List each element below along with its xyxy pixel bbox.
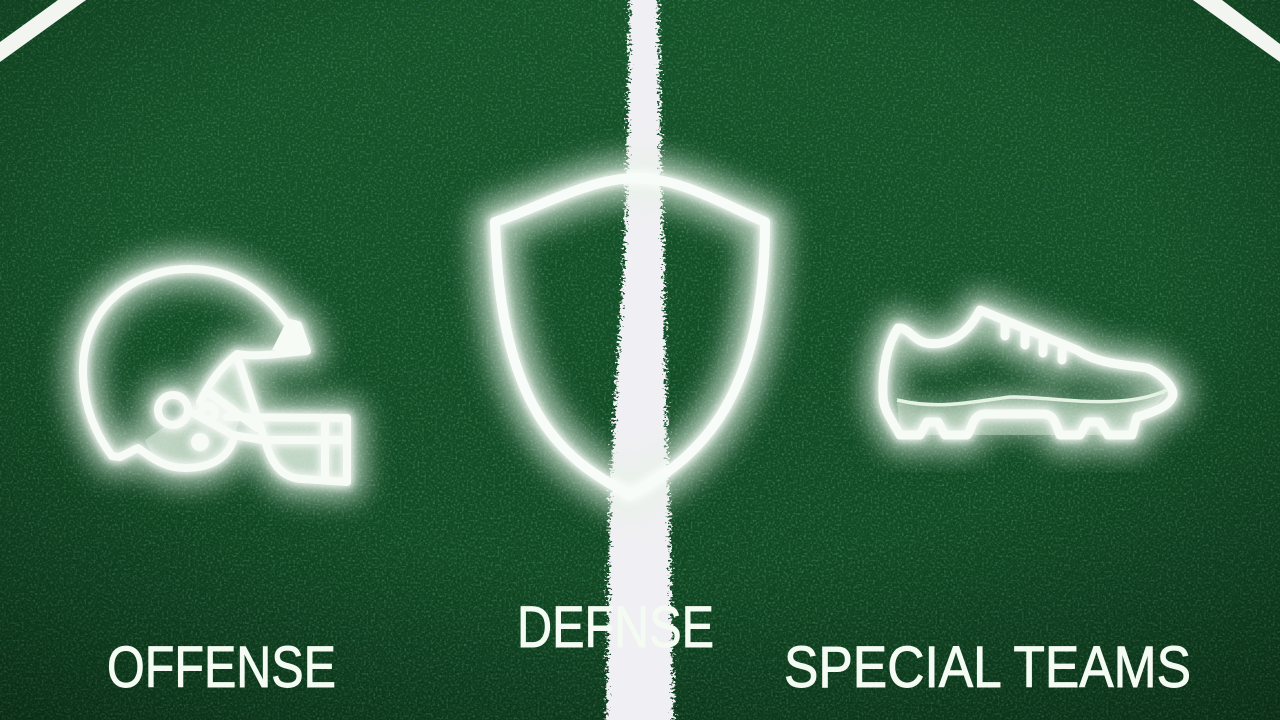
label: offense: OFFENSE (107, 635, 336, 700)
icon: shield (defense) (495, 178, 765, 495)
label: defense: DEFNSE (517, 595, 714, 660)
right corner field line (1193, 0, 1280, 62)
label: special teams: SPECIAL TEAMS (784, 635, 1191, 700)
left corner field line (0, 0, 86, 62)
center yard line (606, 0, 674, 720)
icon: helmet (offense) (83, 269, 347, 482)
icon: cleat (special teams) (883, 310, 1173, 435)
